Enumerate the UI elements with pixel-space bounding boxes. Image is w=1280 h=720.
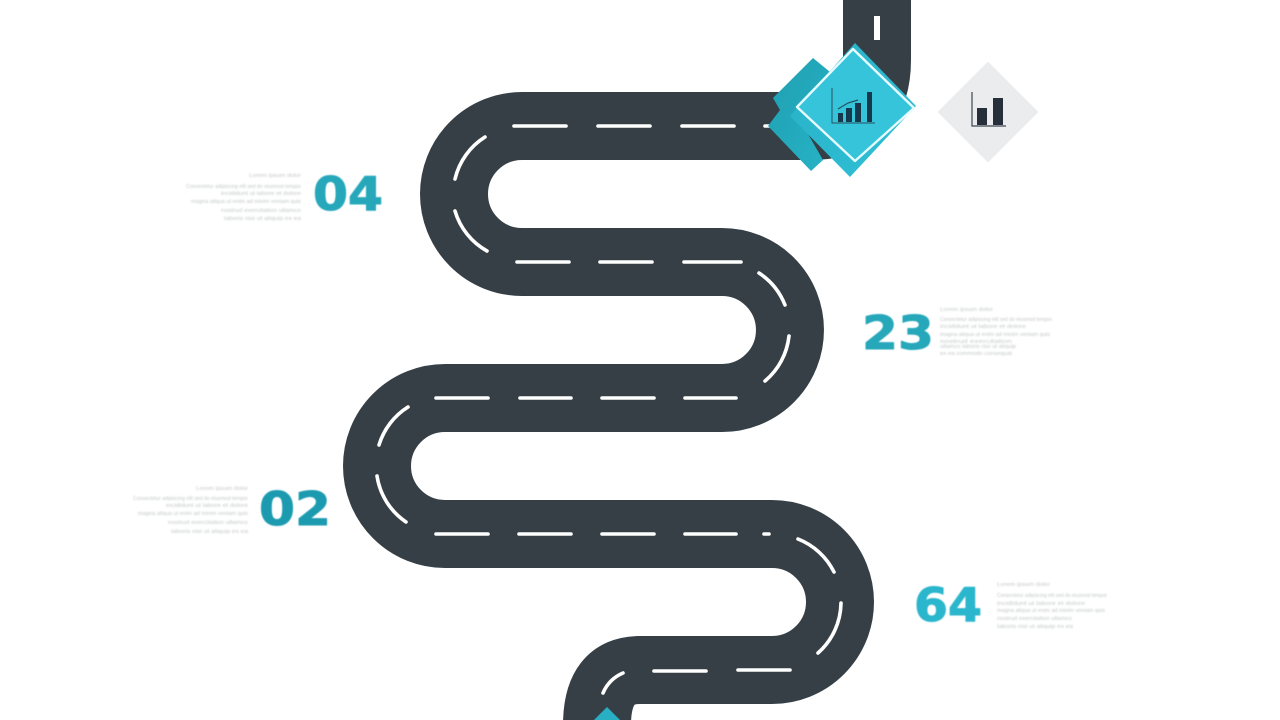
text block 23: nostrud exercitation bbox=[940, 339, 1012, 345]
number 23: 23 bbox=[862, 306, 934, 360]
text block 04: Consectetur adipiscing elit sed do eiusmod tempor bbox=[186, 184, 301, 190]
label: 04 bbox=[186, 167, 383, 222]
text block 04: laboris nisi ut aliquip ex ea bbox=[224, 216, 301, 222]
text block 02: incididunt ut labore et dolore bbox=[166, 503, 248, 509]
text block 23: ullamco laboris nisi ut aliquip bbox=[940, 344, 1016, 350]
text block 64 bbox=[997, 582, 1107, 630]
icon: two bars bbox=[972, 92, 1006, 126]
text block 23 bbox=[940, 307, 1052, 357]
text block 64: laboris nisi ut aliquip ex ea bbox=[997, 624, 1073, 630]
marker: main teal diamond with bar chart icon bbox=[768, 43, 916, 177]
text block 64: nostrud exercitation ullamco bbox=[997, 616, 1072, 622]
text block 23: incididunt ut labore et dolore bbox=[940, 324, 1026, 330]
marker: bottom teal diamond bbox=[589, 707, 625, 720]
text block 02 bbox=[133, 486, 249, 535]
icon: growth bars bbox=[832, 88, 875, 123]
number 02: 02 bbox=[259, 482, 331, 536]
label: 64 bbox=[914, 578, 1107, 632]
text block 02: laboris nisi ut aliquip ex ea bbox=[171, 529, 248, 535]
label: 23 bbox=[862, 306, 1052, 360]
text block 04: nostrud exercitation ullamco bbox=[221, 208, 301, 214]
text block 02: Lorem ipsum dolor bbox=[196, 486, 248, 492]
text block 04: Lorem ipsum dolor bbox=[249, 173, 301, 179]
number 04: 04 bbox=[313, 167, 383, 221]
text block 04 bbox=[186, 173, 302, 222]
road centre dashes bbox=[377, 16, 877, 693]
label: 02 bbox=[133, 482, 331, 536]
text block 02: magna aliqua ut enim ad minim veniam quis bbox=[138, 511, 249, 517]
text block 64: Lorem ipsum dolor bbox=[997, 582, 1050, 588]
text block 23: magna aliqua ut enim ad minim veniam quis bbox=[940, 332, 1051, 338]
text block 02: Consectetur adipiscing elit sed do eiusmod tempor bbox=[133, 496, 248, 502]
grey diamond with bar icon bbox=[939, 63, 1037, 161]
number 64: 64 bbox=[914, 578, 982, 632]
text block 04: incididunt ut labore et dolore bbox=[221, 191, 301, 197]
text block 23: ex ea commodo consequat bbox=[940, 351, 1013, 357]
text block 02: nostrud exercitation ullamco bbox=[168, 520, 248, 526]
text block 64: magna aliqua ut enim ad minim veniam quis bbox=[997, 608, 1106, 614]
text block 23: Lorem ipsum dolor bbox=[940, 307, 993, 313]
text block 23: Consectetur adipiscing elit sed do eiusmod tempor bbox=[940, 317, 1052, 323]
text block 04: magna aliqua ut enim ad minim veniam quis bbox=[191, 199, 302, 205]
text block 64: incididunt ut labore et dolore bbox=[997, 601, 1085, 607]
road bbox=[377, 0, 877, 720]
text block 64: Consectetur adipiscing elit sed do eiusmod tempor bbox=[997, 593, 1107, 599]
